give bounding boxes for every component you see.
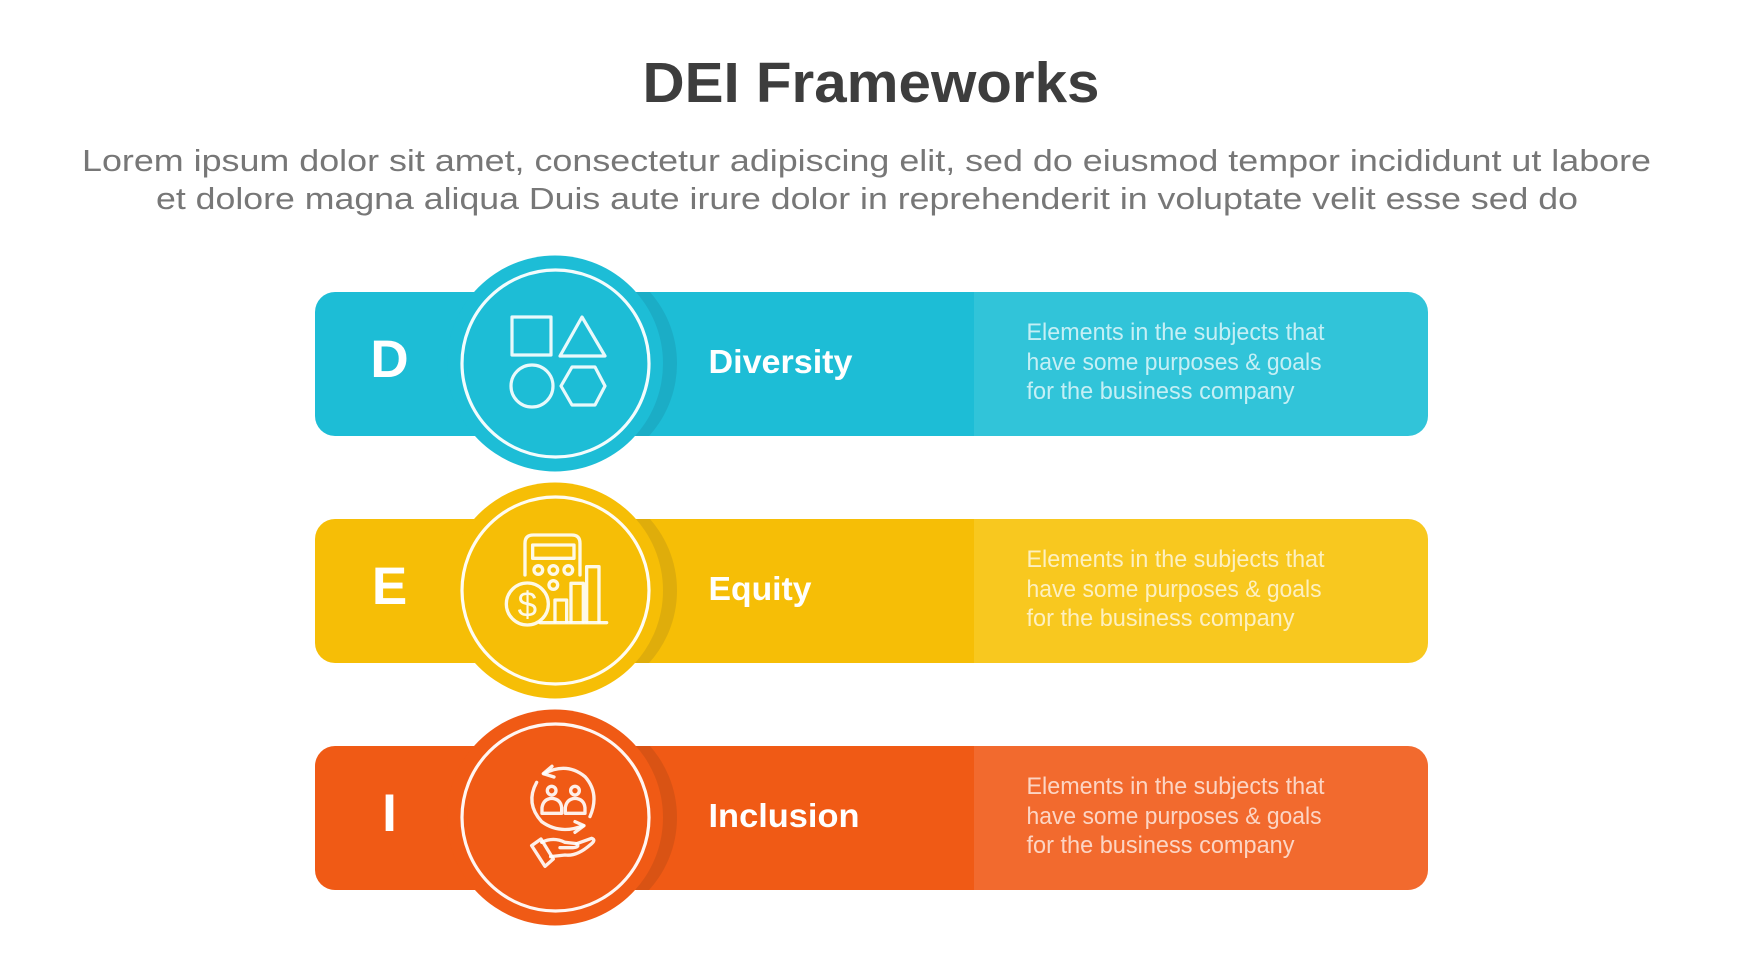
- letter I: I: [382, 784, 397, 843]
- label: Equity: Equity: [708, 570, 812, 607]
- circle badge: [447, 710, 663, 926]
- description: diversity: for the business company: [1026, 378, 1294, 405]
- circle ring: [462, 270, 649, 457]
- icon: calculator, coin and bars: $: [518, 586, 537, 625]
- band: inclusion left: [315, 746, 974, 890]
- description: equity: for the business company: [1026, 605, 1294, 632]
- description: equity: Elements in the subjects that: [1026, 546, 1325, 573]
- band: inclusion description background: [974, 746, 1428, 890]
- label: Inclusion: Inclusion: [708, 797, 860, 834]
- band: equity left: [315, 519, 974, 663]
- panel: equity: [315, 482, 1428, 698]
- description: inclusion: [1026, 773, 1325, 859]
- circle badge: [447, 482, 663, 698]
- band: diversity description background: [974, 292, 1428, 436]
- circle ring: [462, 724, 649, 911]
- icon: shapes: [511, 317, 605, 407]
- subtitle text: [82, 143, 1651, 216]
- circle shadow: [635, 292, 677, 436]
- panel: inclusion: [315, 710, 1428, 926]
- description: inclusion: for the business company: [1026, 832, 1294, 859]
- band: diversity left: [315, 292, 974, 436]
- label: Diversity: Diversity: [708, 343, 853, 380]
- circle shadow: [635, 746, 677, 890]
- letter D: D: [370, 330, 409, 389]
- description: equity: [1026, 546, 1325, 632]
- circle shadow: [635, 519, 677, 663]
- letter E: E: [372, 557, 407, 616]
- description: diversity: [1026, 319, 1325, 405]
- band: equity description background: [974, 519, 1428, 663]
- icon: people, cycle arrows and hand: [532, 766, 594, 866]
- description: diversity: Elements in the subjects that: [1026, 319, 1325, 346]
- circle ring: [462, 497, 649, 684]
- panel: diversity: [315, 256, 1428, 472]
- description: inclusion: have some purposes & goals: [1026, 803, 1322, 830]
- description: diversity: have some purposes & goals: [1026, 349, 1322, 376]
- description: equity: have some purposes & goals: [1026, 576, 1322, 603]
- subtitle text: et dolore magna aliqua Duis aute irure dolor in reprehenderit in voluptate velit esse sed do: [156, 181, 1578, 216]
- description: inclusion: Elements in the subjects that: [1026, 773, 1325, 800]
- title: DEI Frameworks: [642, 51, 1100, 115]
- subtitle text: Lorem ipsum dolor sit amet, consectetur adipiscing elit, sed do eiusmod tempor incididunt ut labore: [82, 143, 1651, 178]
- icon: calculator, coin and bars: [506, 535, 607, 625]
- circle badge: [447, 256, 663, 472]
